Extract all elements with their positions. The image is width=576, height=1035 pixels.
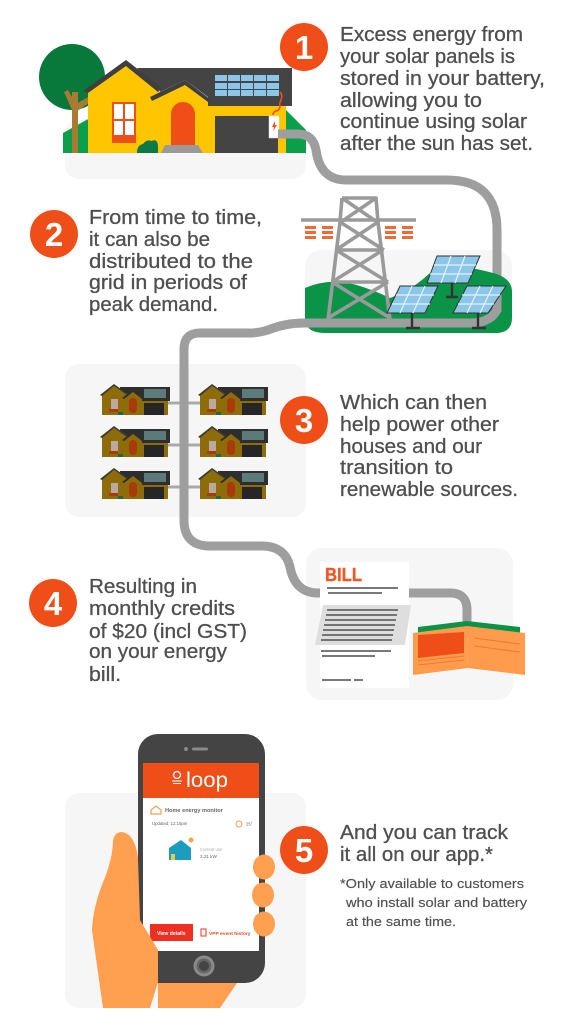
panel: bill background bbox=[306, 548, 513, 700]
step 3 badge: 3 bbox=[295, 402, 313, 439]
icon: hand back bbox=[158, 952, 265, 1008]
step 1 text: allowing you to bbox=[340, 90, 482, 112]
step 4 text bbox=[89, 576, 247, 686]
heading: bill: BILL bbox=[325, 565, 362, 585]
app reading bbox=[200, 847, 223, 859]
step 4 text: of $20 (incl GST) bbox=[89, 621, 247, 643]
step 3 text: help power other bbox=[340, 414, 499, 436]
panel: phone background bbox=[65, 793, 306, 1008]
icon: home button bbox=[195, 957, 213, 975]
icon: window bbox=[112, 102, 136, 143]
step 3 text: houses and our bbox=[340, 436, 482, 458]
step 1 text bbox=[340, 24, 545, 155]
icon: insulators bbox=[305, 226, 413, 239]
step 1 text: stored in your battery, bbox=[340, 68, 545, 90]
step 2 text: From time to time, bbox=[89, 207, 262, 229]
app button: View details bbox=[157, 931, 186, 937]
step 3 badge bbox=[280, 396, 328, 444]
step 2 badge: 2 bbox=[45, 216, 63, 253]
icon: pylon bbox=[301, 198, 416, 320]
app reading: Current use bbox=[200, 847, 223, 852]
step 5 text: it all on our app.* bbox=[340, 844, 493, 866]
step 2 text bbox=[89, 207, 262, 316]
illustration: hand holding phone bbox=[92, 734, 275, 1008]
step 4 badge bbox=[29, 579, 77, 627]
step 2 text: grid in periods of bbox=[89, 272, 247, 294]
step 3 text: transition to bbox=[340, 457, 453, 479]
illustration: connected houses bbox=[100, 349, 268, 520]
footnote: *Only available to customers bbox=[340, 877, 524, 891]
icon: fingers bbox=[252, 854, 275, 936]
icon: wallet bbox=[413, 621, 525, 675]
step 3 text bbox=[340, 392, 518, 501]
step 1 text: your solar panels is bbox=[340, 46, 515, 68]
step 2 badge bbox=[30, 210, 78, 258]
app reading: 3.21 kW bbox=[200, 854, 218, 859]
step 4 text: monthly credits bbox=[89, 598, 235, 620]
illustration: transmission tower and solar farm bbox=[184, 198, 512, 593]
app title: Home energy monitor bbox=[165, 808, 224, 814]
step 5 text bbox=[340, 822, 509, 866]
app link bbox=[201, 929, 251, 937]
footnote: at the same time. bbox=[346, 915, 456, 929]
step 4 badge: 4 bbox=[44, 585, 63, 622]
icon: rooftop solar panels bbox=[215, 75, 279, 96]
app title: 25° bbox=[246, 822, 253, 826]
step 5 badge bbox=[280, 826, 328, 874]
icon: solar array right bbox=[453, 286, 506, 328]
app header: loop bbox=[186, 769, 228, 792]
pipe: grid to houses bbox=[184, 288, 497, 593]
app title bbox=[151, 806, 253, 827]
icon: solar array back bbox=[427, 256, 480, 297]
icon: hand palm and thumb bbox=[92, 832, 158, 1008]
step 1 text: continue using solar bbox=[340, 111, 527, 133]
step 5 text: And you can track bbox=[340, 822, 509, 844]
step 1 badge: 1 bbox=[295, 29, 313, 66]
illustration: house with solar panels bbox=[39, 44, 306, 153]
phone body bbox=[138, 734, 265, 983]
app button bbox=[150, 924, 193, 941]
pipe: energy line from battery to grid bbox=[278, 134, 497, 288]
app link: VPP event history bbox=[209, 931, 251, 937]
icon: battery bbox=[269, 116, 279, 138]
phone screen bbox=[143, 763, 259, 951]
panel: grid background bbox=[305, 250, 512, 333]
step 3 text: renewable sources. bbox=[340, 479, 518, 501]
step 1 badge bbox=[280, 23, 328, 71]
step 4 text: Resulting in bbox=[89, 576, 197, 598]
icon: solar array left bbox=[387, 286, 438, 328]
step 5 badge: 5 bbox=[295, 832, 313, 869]
icon: front door bbox=[171, 102, 195, 145]
app house icon bbox=[169, 838, 194, 860]
panel: houses background bbox=[65, 364, 306, 517]
step 1 text: after the sun has set. bbox=[340, 133, 533, 155]
illustration: bill and wallet bbox=[315, 562, 525, 688]
footnote bbox=[340, 877, 528, 929]
step 3 text: Which can then bbox=[340, 392, 487, 414]
step 4 text: on your energy bbox=[89, 641, 227, 663]
step 1 text: Excess energy from bbox=[340, 24, 523, 46]
app header bbox=[143, 763, 259, 798]
panel: house background bbox=[65, 120, 306, 179]
step 2 text: distributed to the bbox=[89, 251, 253, 273]
step 4 text: bill. bbox=[89, 664, 121, 686]
step 2 text: peak demand. bbox=[89, 294, 218, 316]
footnote: who install solar and battery bbox=[345, 896, 528, 910]
app title: Updated: 12:15pm bbox=[152, 821, 188, 826]
step 2 text: it can also be bbox=[89, 229, 210, 251]
